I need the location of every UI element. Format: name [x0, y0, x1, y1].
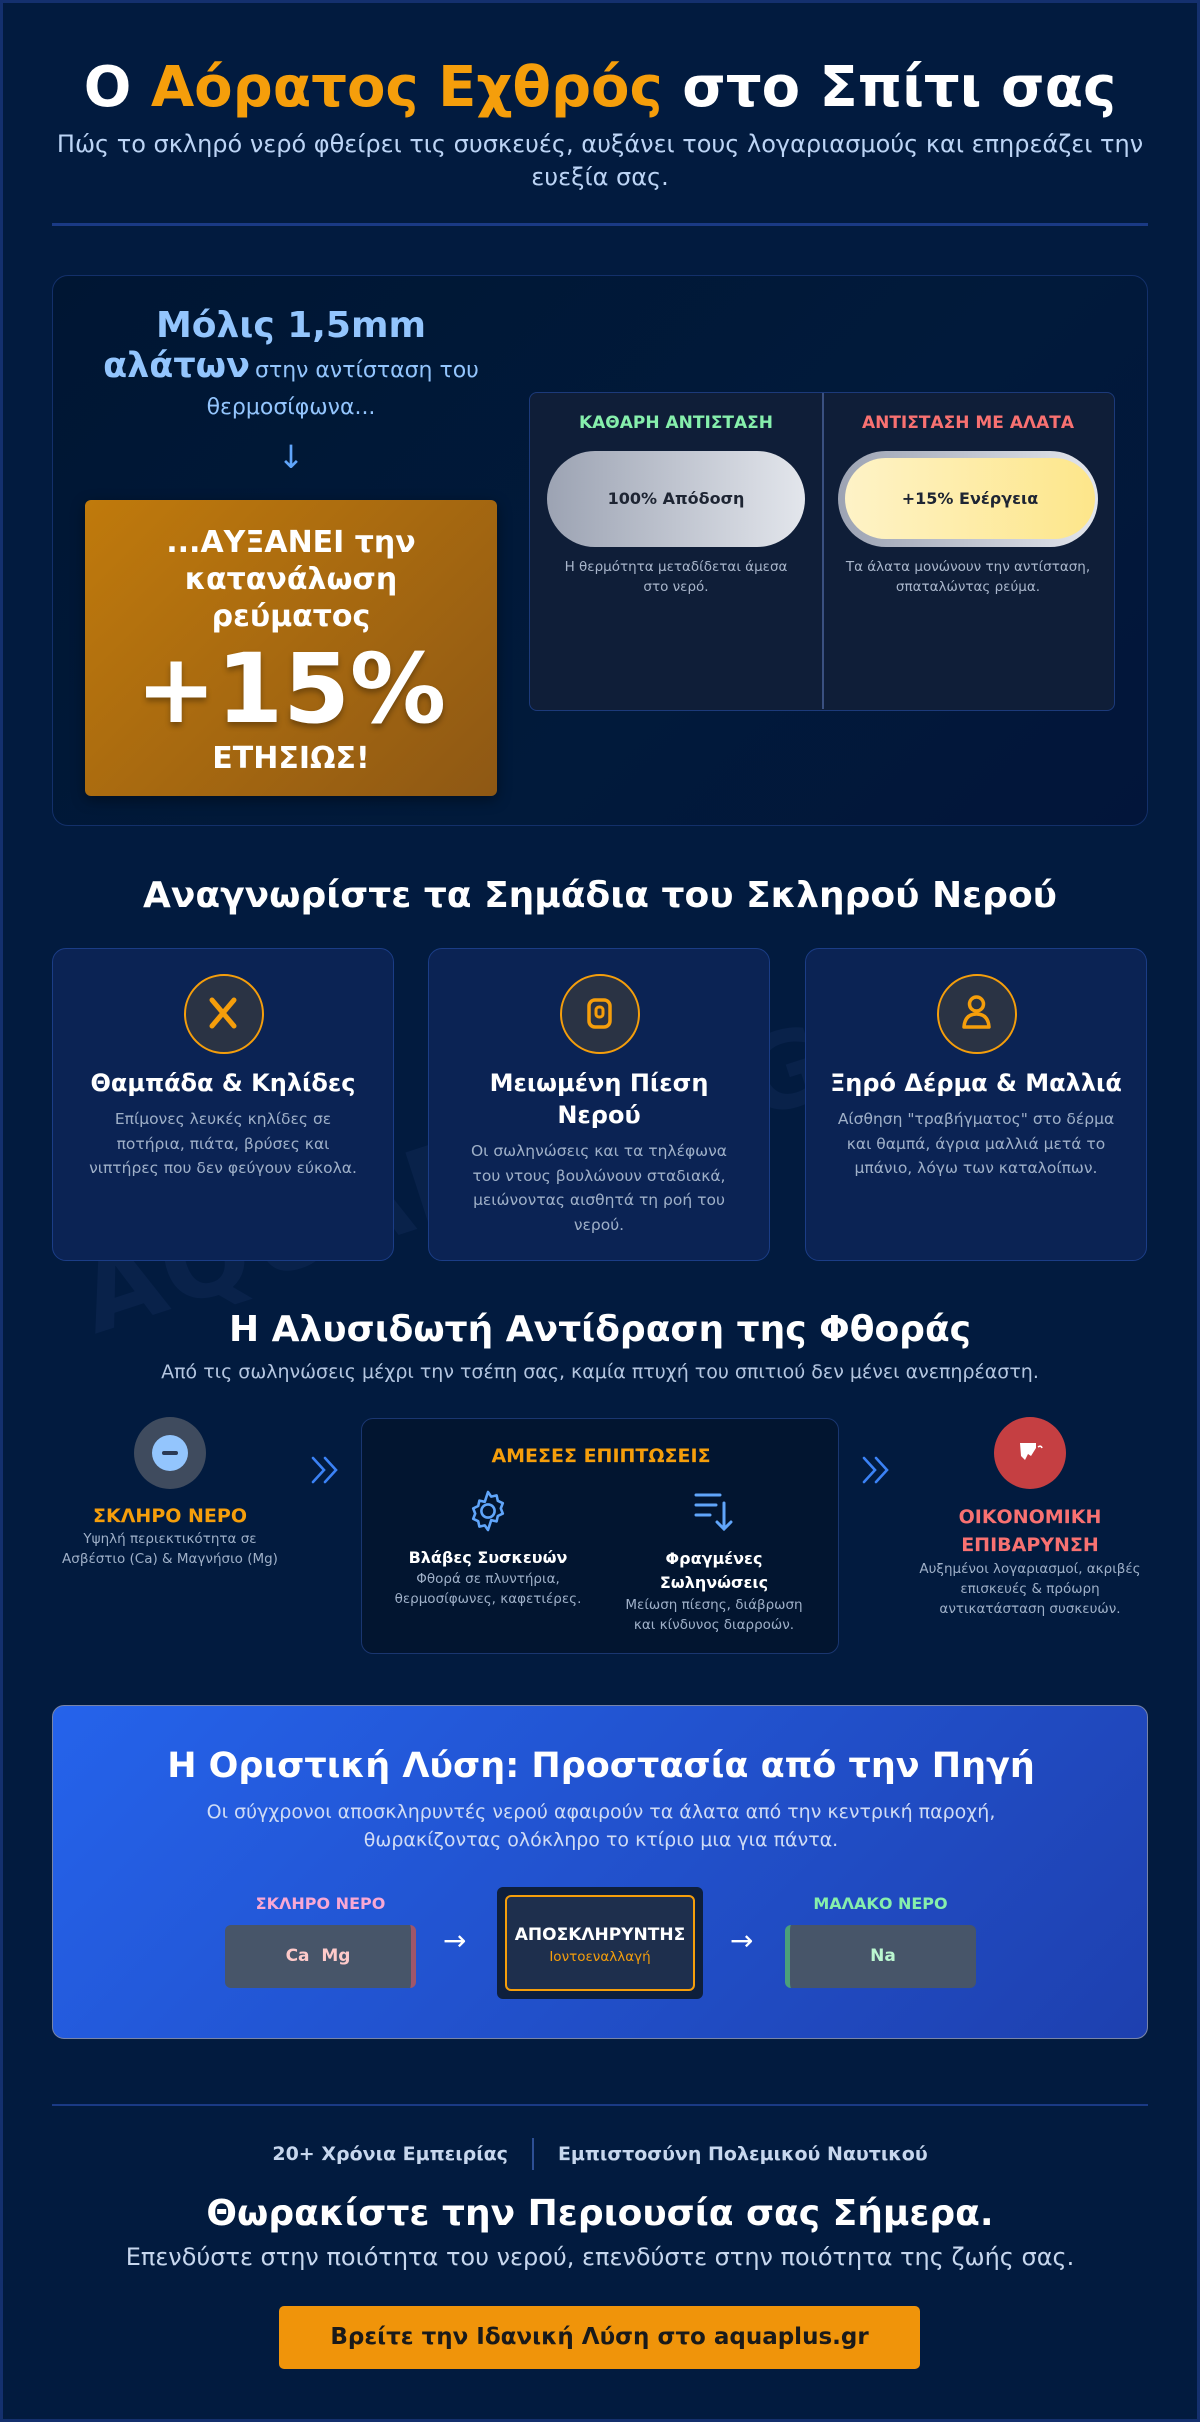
callout: +15%: ρεύματος — [212, 599, 370, 634]
flow: financial burden: επισκευές & πρόωρη — [960, 1581, 1100, 1597]
effect: appliances: θερμοσίφωνες, καφετιέρες. — [395, 1591, 581, 1607]
subheading: Από τις σωληνώσεις μέχρι την τσέπη σας, καμία πτυχή του σπιτιού δεν μένει ανεπηρέαστη. — [161, 1361, 1039, 1383]
scaled element: σπαταλώντας ρεύμα. — [896, 579, 1040, 595]
callout: +15%: ΕΤΗΣΙΩΣ! — [212, 741, 370, 776]
effect: pipes — [625, 1494, 803, 1633]
cta subheading: Επενδύστε στην ποιότητα του νερού, επενδύστε στην ποιότητα της ζωής σας. — [126, 2243, 1074, 2271]
scaled element: +15% Ενέργεια — [902, 489, 1038, 508]
button — [279, 2306, 920, 2369]
card: skin — [805, 948, 1147, 1261]
effect: appliances — [395, 1490, 581, 1607]
icon: person — [937, 974, 1017, 1054]
trust badges — [272, 2138, 928, 2170]
effect: pipes: Φραγμένες — [666, 1549, 762, 1568]
text: 1.5mm salts: αλάτων στην αντίσταση του θερμοσίφωνα... — [103, 346, 479, 420]
flow: hard water: Ασβέστιο (Ca) & Μαγνήσιο (Mg) — [62, 1551, 278, 1567]
clean element: στο νερό. — [643, 579, 709, 595]
diagram: hard water: ΣΚΛΗΡΟ ΝΕΡΟ — [256, 1894, 385, 1913]
effect: appliances: Φθορά σε πλυντήρια, — [416, 1571, 560, 1587]
diagram: hard water — [225, 1894, 416, 1988]
comparison panel — [529, 392, 1115, 711]
heading: chain reaction: Η Αλυσιδωτή Αντίδραση της Φθοράς — [229, 1309, 971, 1350]
card: spots — [52, 948, 394, 1261]
callout: +15%: ...ΑΥΞΑΝΕΙ την — [166, 525, 416, 560]
button: Βρείτε την Ιδανική Λύση στο aquaplus.gr — [330, 2324, 869, 2350]
icon: x — [184, 974, 264, 1054]
card: pressure — [428, 948, 770, 1261]
softener — [497, 1887, 703, 1999]
clean element: Η θερμότητα μεταδίδεται άμεσα — [565, 559, 787, 575]
flow: financial burden: αντικατάσταση συσκευών. — [939, 1601, 1121, 1617]
panel: immediate effects: ΑΜΕΣΕΣ ΕΠΙΠΤΩΣΕΙΣ — [491, 1445, 711, 1467]
diagram: soft water: ΜΑΛΑΚΟ ΝΕΡΟ — [813, 1894, 948, 1913]
flow: hard water — [62, 1417, 278, 1567]
text: 1.5mm salts: Μόλις 1,5mm — [156, 305, 426, 346]
effect: appliances: Βλάβες Συσκευών — [409, 1548, 567, 1567]
callout: +15%: +15% — [136, 633, 446, 745]
card: skin: Αίσθηση "τραβήγματος" στο δέρμα και θαμπά, άγρια μαλλιά μετά το μπάνιο, λόγω των καταλοίπων. — [838, 1110, 1114, 1177]
scaled element: ΑΝΤΙΣΤΑΣΗ ΜΕ ΑΛΑΤΑ — [862, 413, 1074, 433]
icon: minus — [134, 1417, 206, 1489]
diagram: hard water: Ca Mg — [286, 1946, 350, 1966]
clean element: 100% Απόδοση — [608, 489, 744, 508]
diagram: soft water — [785, 1894, 976, 1988]
effect: pipes: Σωληνώσεις — [660, 1573, 768, 1592]
panel: solution: Η Οριστική Λύση: Προστασία από την Πηγή — [167, 1746, 1035, 1786]
icon: shower — [560, 974, 640, 1054]
arrow — [312, 1456, 338, 1484]
panel: heating element — [52, 275, 1148, 826]
heading: signs: Αναγνωρίστε τα Σημάδια του Σκληρού Νερού — [143, 875, 1057, 916]
scaled element: Τα άλατα μονώνουν την αντίσταση, — [846, 559, 1090, 575]
card: pressure: Νερού — [557, 1101, 641, 1129]
softener: Ιοντοεναλλαγή — [549, 1949, 651, 1965]
panel: solution: Οι σύγχρονοι αποσκληρυντές νερού αφαιρούν τα άλατα από την κεντρική παροχή, — [207, 1801, 995, 1823]
subtitle: Πώς το σκληρό νερό φθείρει τις συσκευές, αυξάνει τους λογαριασμούς και επηρεάζει την ευεξία σας. — [57, 130, 1143, 191]
flow: financial burden: Αυξημένοι λογαριασμοί, ακριβές — [919, 1561, 1141, 1577]
cta heading: Θωρακίστε την Περιουσία σας Σήμερα. — [206, 2193, 994, 2234]
title: Ο Αόρατος Εχθρός στο Σπίτι σας — [84, 55, 1116, 120]
softener: ΑΠΟΣΚΛΗΡΥΝΤΗΣ — [515, 1925, 685, 1945]
card: pressure: Μειωμένη Πίεση — [490, 1069, 708, 1097]
diagram: soft water: Na — [870, 1946, 896, 1966]
flow: financial burden: ΟΙΚΟΝΟΜΙΚΗ — [959, 1506, 1101, 1528]
scaled element — [838, 413, 1098, 595]
trust badges: 20+ Χρόνια Εμπειρίας — [272, 2143, 508, 2165]
icon: red circle — [994, 1417, 1066, 1489]
panel: immediate effects — [361, 1418, 839, 1654]
callout: +15% — [85, 500, 497, 796]
arrow: → — [443, 1924, 466, 1957]
clean element: ΚΑΘΑΡΗ ΑΝΤΙΣΤΑΣΗ — [579, 413, 773, 433]
watermark: AQUAPLUS.GR — [65, 975, 924, 1358]
trust badges: Εμπιστοσύνη Πολεμικού Ναυτικού — [558, 2143, 928, 2165]
clean element — [547, 413, 805, 595]
card: spots: Θαμπάδα & Κηλίδες — [91, 1069, 355, 1097]
panel: solution: θωρακίζοντας ολόκληρο το κτίριο μια για πάντα. — [364, 1829, 838, 1851]
effect: pipes: και κίνδυνος διαρροών. — [634, 1617, 794, 1633]
card: skin: Ξηρό Δέρμα & Μαλλιά — [830, 1069, 1122, 1097]
panel: solution — [52, 1705, 1148, 2039]
flow: hard water: Υψηλή περιεκτικότητα σε — [83, 1531, 257, 1547]
arrow: ↓ — [278, 438, 304, 476]
flow: financial burden: ΕΠΙΒΑΡΥΝΣΗ — [961, 1534, 1099, 1556]
flow: financial burden — [919, 1417, 1141, 1617]
arrow: → — [730, 1924, 753, 1957]
text: 1.5mm salts — [103, 305, 479, 420]
flow: hard water: ΣΚΛΗΡΟ ΝΕΡΟ — [93, 1505, 247, 1527]
card: pressure: Οι σωληνώσεις και τα τηλέφωνα του ντους βουλώνουν σταδιακά, μειώνοντας αισθητά τη ροή του νερού. — [471, 1142, 727, 1234]
arrow — [862, 1456, 889, 1484]
effect: pipes: Μείωση πίεσης, διάβρωση — [625, 1597, 803, 1613]
callout: +15%: κατανάλωση — [185, 562, 397, 597]
card: spots: Επίμονες λευκές κηλίδες σε ποτήρια, πιάτα, βρύσες και νιπτήρες που δεν φεύγουν εύκολα. — [89, 1110, 357, 1177]
